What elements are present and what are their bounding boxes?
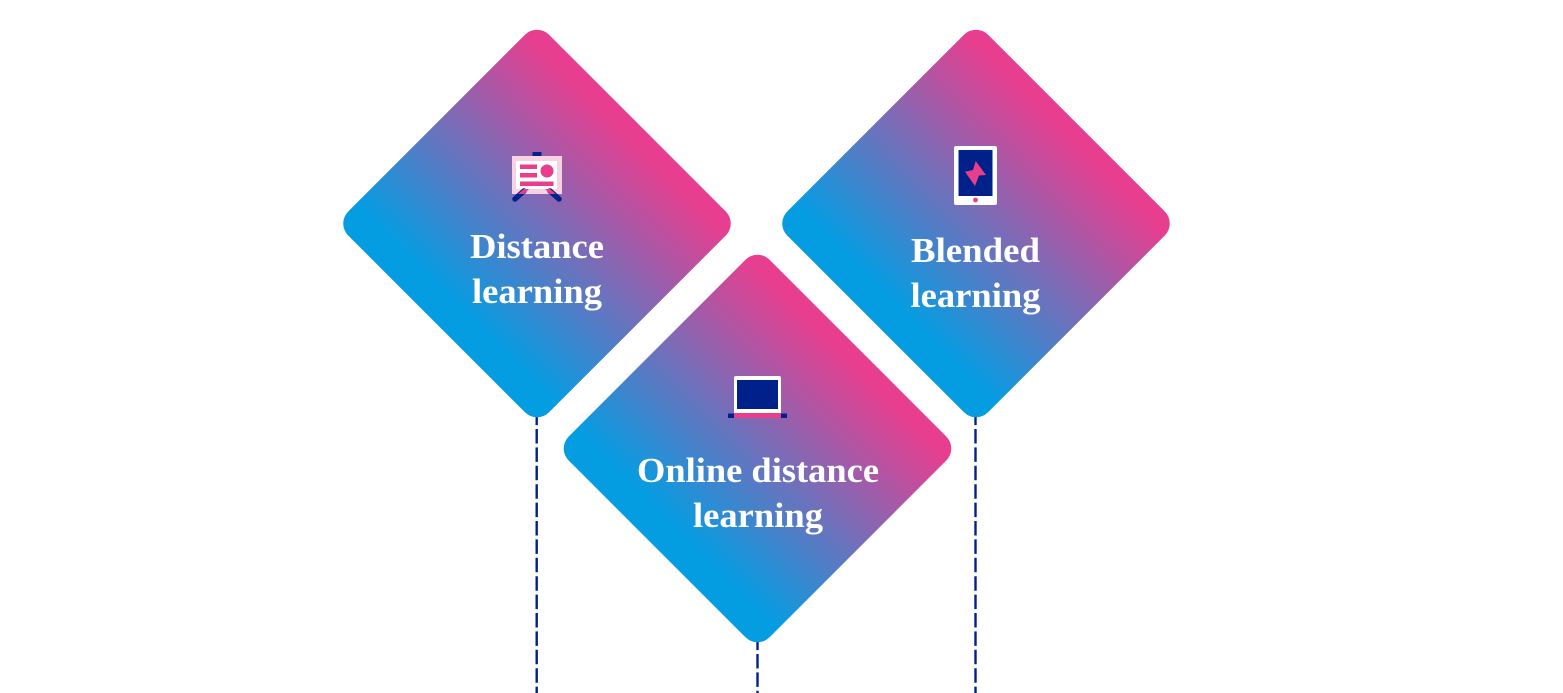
label: Blended learning [910, 231, 1041, 315]
dashed connector: blended learning [974, 411, 977, 693]
label: Distance learning [470, 227, 604, 311]
label: Blended learning: learning [910, 276, 1041, 315]
diamond background [557, 248, 958, 649]
label: Online distance learning: learning [693, 496, 824, 535]
panel: blended learning [775, 23, 1177, 424]
diamond background [775, 23, 1177, 424]
panel: online distance learning [557, 248, 958, 649]
label: Blended learning: Blended [911, 231, 1041, 270]
icon: presentation board [512, 152, 562, 199]
label: Online distance learning: Online distance [637, 451, 879, 490]
icon: tablet [954, 146, 997, 205]
panel: distance learning [336, 23, 738, 424]
dashed connector: distance learning [536, 411, 538, 693]
label: Distance learning: learning [472, 272, 603, 311]
icon: laptop [728, 376, 787, 418]
label: Online distance learning [637, 451, 879, 535]
dashed connector: online distance learning [756, 636, 759, 693]
diamond background [336, 23, 738, 424]
label: Distance learning: Distance [470, 227, 604, 266]
